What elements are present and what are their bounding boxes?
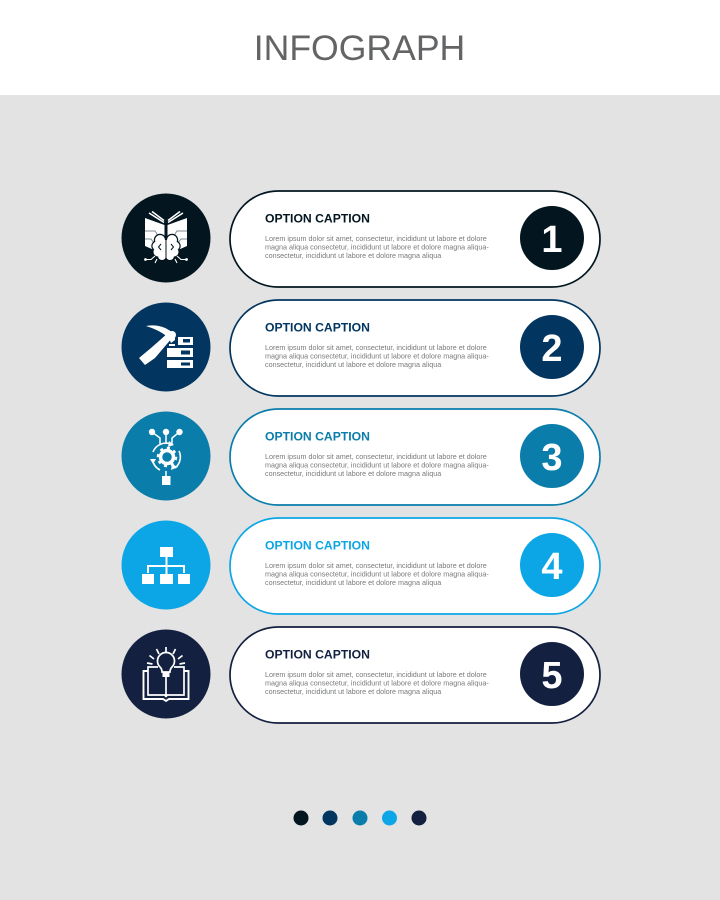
body text: Lorem ipsum dolor sit amet, consectetur, incididunt ut labore et dolore [265,561,487,570]
panel: option 4 [122,518,600,614]
caption: OPTION CAPTION [265,430,370,444]
number badge: 5 [541,655,563,697]
panel: option 2 [122,300,600,396]
icon: hierarchy chart [122,520,210,610]
body text: consectetur, incididunt ut labore et dolore magna aliqua [265,578,441,587]
number badge [520,424,584,488]
body text: Lorem ipsum dolor sit amet, consectetur, incididunt ut labore et dolore [265,452,487,461]
pill card [230,627,600,723]
caption: OPTION CAPTION [265,648,370,662]
number badge [520,642,584,706]
body text: magna aliqua consectetur, incididunt ut labore et dolore magna aliqua- [265,460,489,470]
icon: book with brain [122,194,210,282]
body text: consectetur, incididunt ut labore et dolore magna aliqua [265,469,441,478]
title: INFOGRAPH [254,28,465,68]
body text [265,343,489,369]
icon: open book with light bulb [122,630,210,718]
pill card [230,300,600,396]
pill card [230,191,600,287]
number badge: 4 [541,546,563,588]
number badge [520,315,584,379]
body text: Lorem ipsum dolor sit amet, consectetur, incididunt ut labore et dolore [265,234,487,243]
body text: Lorem ipsum dolor sit amet, consectetur, incididunt ut labore et dolore [265,670,487,679]
body text [265,234,489,260]
number badge [520,533,584,597]
body text: magna aliqua consectetur, incididunt ut labore et dolore magna aliqua- [265,570,489,578]
body text: magna aliqua consectetur, incididunt ut labore et dolore magna aliqua- [265,678,489,688]
body text [265,452,489,478]
icon: pickaxe and blocks [122,302,210,392]
pagination dots [294,810,426,826]
body text [265,561,489,587]
body text [265,670,489,696]
pill card [230,409,600,505]
number badge: 3 [541,437,563,479]
panel: option 5 [122,627,600,723]
body text: consectetur, incididunt ut labore et dolore magna aliqua [265,251,441,260]
pill card [230,518,600,614]
body text: magna aliqua consectetur, incididunt ut labore et dolore magna aliqua- [265,352,489,360]
caption: OPTION CAPTION [265,538,370,552]
caption: OPTION CAPTION [265,320,370,334]
number badge: 2 [541,328,563,370]
body text: magna aliqua consectetur, incididunt ut labore et dolore magna aliqua- [265,242,489,252]
panel: option 3 [122,409,600,505]
caption: OPTION CAPTION [265,212,370,226]
icon: gear with nodes [122,412,210,500]
panel: option 1 [122,191,600,287]
number badge [520,206,584,270]
number badge: 1 [541,219,563,261]
body text: consectetur, incididunt ut labore et dolore magna aliqua [265,360,441,369]
body text: Lorem ipsum dolor sit amet, consectetur, incididunt ut labore et dolore [265,343,487,352]
body text: consectetur, incididunt ut labore et dolore magna aliqua [265,687,441,696]
